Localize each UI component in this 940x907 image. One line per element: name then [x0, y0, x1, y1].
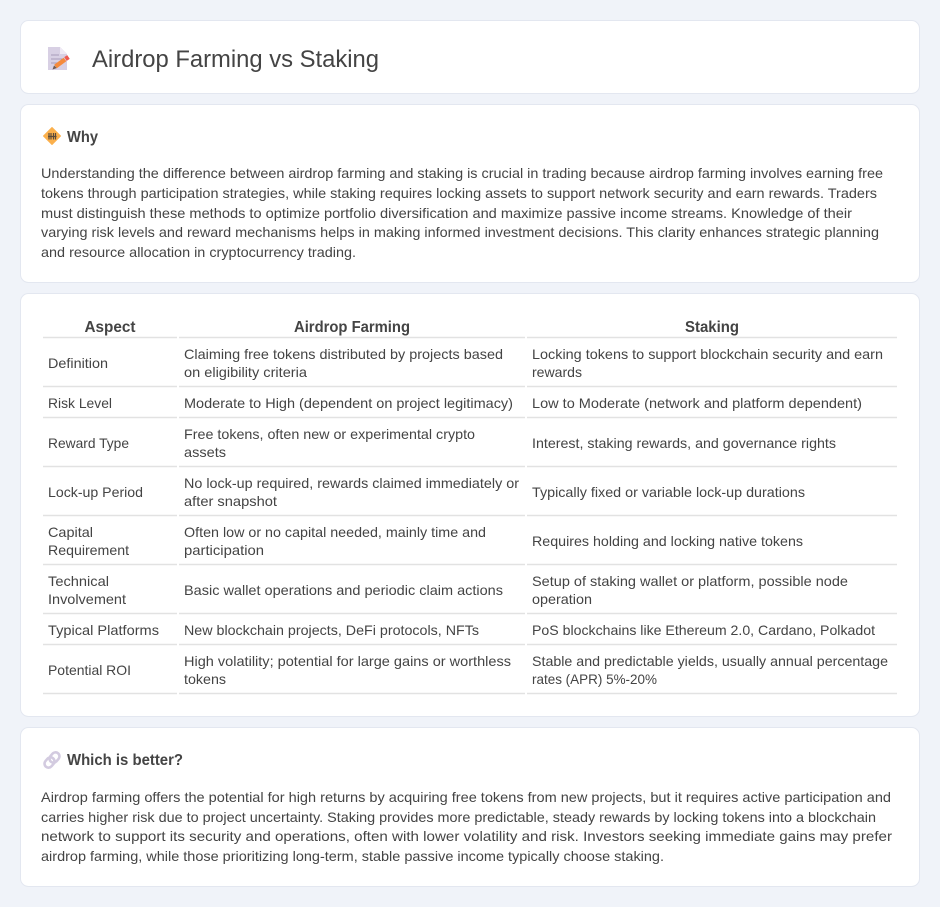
title: Airdrop Farming vs Staking: [92, 46, 379, 73]
row: reward type: Free tokens, often new or experimental crypto: [184, 426, 475, 442]
panel: why: [20, 104, 920, 282]
row: capital requirement: Capital: [48, 524, 93, 540]
row: capital requirement: Requirement: [48, 542, 129, 558]
heading: which is better: Which is better?: [67, 752, 183, 769]
row: risk level: Moderate to High (dependent on project legitimacy): [184, 395, 513, 411]
row: potential roi: Potential ROI: [48, 662, 131, 678]
text block: why paragraph: tokens through participation strategies, while staking requires locking assets to support network security and earn rewards. Traders: [41, 185, 877, 201]
row: definition: Locking tokens to support blockchain security and earn: [532, 346, 883, 362]
text block: why paragraph: and resource allocation in cryptocurrency trading.: [41, 244, 356, 260]
panel: which is better: [20, 728, 920, 886]
table header: [84, 319, 739, 336]
panel: comparison table: [20, 294, 920, 716]
row: technical involvement: operation: [532, 591, 592, 607]
row: technical involvement: Involvement: [48, 591, 126, 607]
icon: document with pencil: [48, 47, 68, 70]
icon: chain link: [43, 751, 61, 769]
text block: which is better paragraph: carries higher risk due to project uncertainty. Staking provides more predictable, steady rewards by locking tokens into a blockchain: [41, 809, 876, 825]
row: potential roi: tokens: [184, 671, 226, 687]
heading: why: Why: [67, 129, 98, 146]
table header: Airdrop Farming: [294, 319, 410, 336]
row: potential roi: High volatility; potential for large gains or worthless: [184, 653, 511, 669]
row: technical involvement: Basic wallet operations and periodic claim actions: [184, 582, 503, 598]
row: potential roi: [48, 653, 888, 687]
row: reward type: assets: [184, 444, 226, 460]
row: definition: Definition: [48, 355, 108, 371]
row: definition: Claiming free tokens distributed by projects based: [184, 346, 503, 362]
row: reward type: Reward Type: [48, 435, 129, 451]
row: risk level: Low to Moderate (network and platform dependent): [532, 395, 862, 411]
text block: which is better paragraph: airdrop farming, while those prioritizing long-term, stable passive income typically choose staking.: [41, 848, 664, 864]
row: lock-up period: Lock-up Period: [48, 484, 143, 500]
row: lock-up period: [48, 475, 805, 509]
text block: why paragraph: Understanding the difference between airdrop farming and staking is crucial in trading because airdrop farming involves earning free: [41, 165, 883, 181]
text block: why paragraph: [41, 165, 883, 260]
row: definition: [48, 346, 883, 380]
row: technical involvement: Setup of staking wallet or platform, possible node: [532, 573, 848, 589]
text block: which is better paragraph: [41, 789, 892, 864]
text block: which is better paragraph: Airdrop farming offers the potential for high returns by acquiring free tokens from new projects, but it requires active participation and: [41, 789, 891, 805]
table header: Aspect: [84, 319, 136, 336]
row: risk level: [48, 395, 862, 411]
row: definition: rewards: [532, 364, 582, 380]
row: typical platforms: [48, 622, 875, 638]
icon: warning diamond: [44, 128, 60, 144]
row: potential roi: Stable and predictable yields, usually annual percentage: [532, 653, 888, 669]
table header: Staking: [685, 319, 739, 336]
row: lock-up period: No lock-up required, rewards claimed immediately or: [184, 475, 519, 491]
row: risk level: Risk Level: [48, 395, 112, 411]
row: definition: on eligibility criteria: [184, 364, 307, 380]
row: lock-up period: after snapshot: [184, 493, 277, 509]
row: capital requirement: Often low or no capital needed, mainly time and: [184, 524, 486, 540]
row: typical platforms: PoS blockchains like Ethereum 2.0, Cardano, Polkadot: [532, 622, 875, 638]
row: capital requirement: participation: [184, 542, 264, 558]
row: technical involvement: Technical: [48, 573, 109, 589]
text block: why paragraph: varying risk levels and reward mechanisms helps in making informed investment decisions. This clarity enhances strategic planning: [41, 224, 879, 240]
row: potential roi: rates (APR) 5%-20%: [532, 671, 657, 687]
row: typical platforms: Typical Platforms: [48, 622, 159, 638]
panel: title header: [20, 20, 920, 94]
row: capital requirement: [48, 524, 803, 558]
row: capital requirement: Requires holding and locking native tokens: [532, 533, 803, 549]
text block: which is better paragraph: network to support its security and operations, often with lower volatility and risk. Investors seeking immediate gains may prefer: [41, 828, 892, 844]
text block: why paragraph: must distinguish these methods to optimize portfolio diversification and maximize passive income streams. Knowledge of their: [41, 205, 852, 221]
row: lock-up period: Typically fixed or variable lock-up durations: [532, 484, 805, 500]
row: typical platforms: New blockchain projects, DeFi protocols, NFTs: [184, 622, 479, 638]
row: reward type: [48, 426, 836, 460]
row: technical involvement: [48, 573, 848, 607]
row: reward type: Interest, staking rewards, and governance rights: [532, 435, 836, 451]
